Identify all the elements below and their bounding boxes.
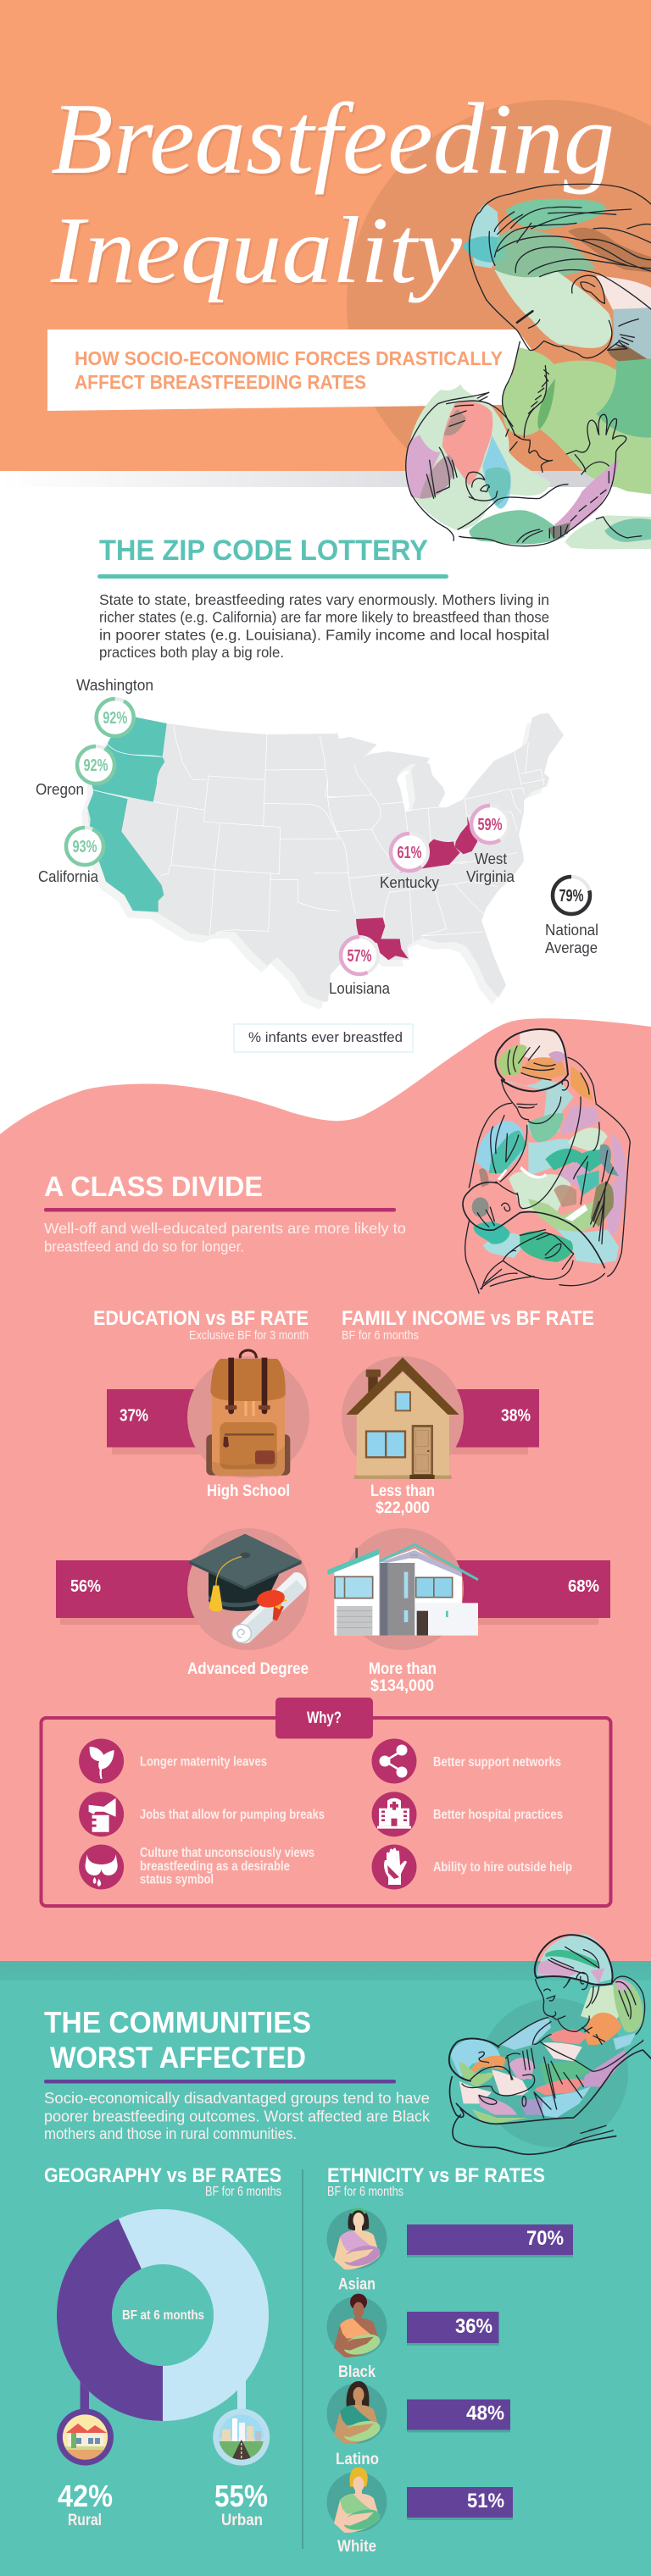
stat ring: West Virginia 59% [471,806,509,843]
tab: why: Why? [307,1709,342,1727]
icon: small house [346,1357,459,1479]
bar: Latino 48% [407,2399,510,2433]
state labels: Oregon [36,781,84,798]
icon: Black mother [327,2294,387,2358]
illustration: mother and baby, line art over watercolour [406,184,651,549]
state labels: Kentucky [380,874,439,891]
chart headings: education and family income: Exclusive BF for 3 month [189,1328,309,1343]
stat ring: Louisiana 57%: 57% [348,947,372,966]
title: Inequality [50,198,462,303]
icon: breast pump [79,1792,124,1836]
subtitle banner: HOW SOCIO-ECONOMIC FORCES DRASTICALLY [75,347,503,369]
bar: less than $22,000 38% [342,1356,539,1478]
intro text: richer states (e.g. California) are far more likely to breastfeed than those [99,608,549,625]
chart heading: geography [44,2164,281,2199]
intro text: poorer breastfeeding outcomes. Worst affected are Black [44,2108,431,2125]
stat ring: Louisiana 57% [341,937,378,974]
state labels: Washington [76,677,153,694]
icon: share network [371,1738,417,1784]
reason: status symbol: breastfeeding as a desirable [140,1859,290,1874]
category labels: $134,000 [370,1677,434,1695]
icon: hospital [371,1792,417,1836]
stat: urban 55%: Urban [221,2512,263,2529]
intro text: in poorer states (e.g. Louisiana). Family income and local hospital [99,627,549,644]
icon: Latino mother [327,2381,387,2445]
state labels: California [38,868,99,885]
map of the United States [36,677,598,1009]
heading: A CLASS DIVIDE [44,1171,263,1202]
heading: WORST AFFECTED [50,2041,306,2075]
tab: why [275,1698,373,1738]
icon: backpack [206,1350,290,1476]
stat: urban 55% [214,2479,268,2529]
bar: White 51%: 51% [467,2490,504,2512]
stat: rural 42%: Rural [68,2512,102,2529]
illustration: baby in arm [449,1934,651,2154]
reason: support networks: Better support networks [433,1755,561,1770]
state labels: National [545,922,598,939]
category labels: High School [207,1482,290,1500]
reason: maternity leave: Longer maternity leaves [140,1755,267,1770]
stat ring: Kentucky 61%: 61% [397,844,422,862]
bar: Asian 70% [407,2224,573,2257]
icon: modern house [327,1544,478,1636]
bar: advanced degree 56% [56,1528,309,1650]
bar: high school 37% [107,1356,309,1478]
icon: leaves [79,1738,124,1784]
bar: Black 36%: 36% [455,2315,492,2338]
chart headings: education and family income: EDUCATION vs BF RATE [93,1307,309,1330]
stat ring: California 93%: 93% [73,838,97,856]
reason: status symbol: status symbol [140,1873,214,1887]
donut chart: rural vs urban [57,2219,246,2421]
title [50,82,616,306]
stat: rural 42% [58,2479,113,2529]
panel: the communities worst affected [0,1934,651,2576]
bar: more than $134,000 68% [342,1528,610,1650]
icon: bra and drops [79,1845,124,1889]
intro text [44,2090,431,2142]
stat ring: California 93% [66,828,103,865]
subtitle banner: AFFECT BREASTFEEDING RATES [75,371,366,393]
donut chart: rural vs urban: BF at 6 months [122,2308,204,2323]
intro text: mothers and those in rural communities. [44,2125,297,2142]
icon: graduation cap and diploma [189,1534,306,1643]
legend: % infants ever breastfed [248,1029,403,1045]
panel: header [0,0,651,508]
bar: high school 37%: 37% [120,1406,148,1425]
stat ring: Washington 92%: 92% [103,709,127,728]
chart heading: geography: GEOGRAPHY vs BF RATES [44,2164,281,2187]
intro text: practices both play a big role. [99,644,284,661]
stat ring: Kentucky 61% [391,834,428,871]
category labels: Less than [370,1482,435,1500]
bar: Latino 48%: 48% [466,2402,504,2425]
bar: White 51% [407,2487,513,2520]
stat: urban 55%: 55% [214,2479,268,2513]
stat ring: Oregon 92% [77,746,114,784]
stat: rural 42%: 42% [58,2479,113,2513]
stat ring: Oregon 92%: 92% [83,756,108,775]
bar: more than $134,000 68%: 68% [568,1577,599,1596]
heading [44,2007,311,2075]
intro text: breastfeed and do so for longer. [44,1238,244,1255]
chart heading: ethnicity [327,2164,545,2199]
highlighted low-rate states [356,816,477,960]
illustration: mother cradling baby [463,1029,630,1294]
bar: Asian 70%: 70% [526,2227,564,2250]
reason: status symbol [140,1846,314,1887]
icon: White mother [327,2468,387,2534]
state labels: Average [545,939,598,956]
title: Breastfeeding [51,82,615,195]
bar: less than $22,000 38%: 38% [501,1406,531,1425]
stat ring: West Virginia 59%: 59% [478,816,503,834]
icon: urban badge [213,2409,270,2465]
title: Inequality [52,201,464,306]
category labels: $22,000 [376,1499,430,1517]
bar: advanced degree 56%: 56% [70,1577,101,1596]
title: Breastfeeding [53,85,616,197]
label: Latino: Latino [336,2451,379,2468]
intro text: Well-off and well-educated parents are more likely to [44,1220,406,1237]
reason: outside help: Ability to hire outside help [433,1860,572,1875]
chart heading: ethnicity: ETHNICITY vs BF RATES [327,2164,545,2187]
chart headings: education and family income [93,1307,594,1343]
panel: a class divide [0,1018,651,1965]
category labels: More than [369,1660,437,1678]
stat ring: Washington 92% [97,699,134,736]
category labels: Advanced Degree [187,1660,309,1678]
hair and face lines [406,184,651,546]
intro text [99,591,549,661]
heading: THE COMMUNITIES [44,2007,311,2040]
reason: hospital practices: Better hospital practices [433,1808,563,1822]
reason: pumping breaks: Jobs that allow for pumping breaks [140,1808,325,1822]
icon: Asian mother [327,2208,387,2269]
chart headings: education and family income: FAMILY INCOME vs BF RATE [342,1307,594,1330]
panel: why? reasons [41,1698,610,1906]
subtitle banner [47,330,532,411]
bar: Black 36% [407,2312,498,2346]
chart headings: education and family income: BF for 6 months [342,1328,419,1343]
stat ring: national average 79%: 79% [559,887,584,906]
chart heading: geography: BF for 6 months [205,2185,281,2199]
intro text: Socio-economically disadvantaged groups tend to have [44,2090,430,2107]
label: Black: Black [338,2363,376,2381]
label: White: White [337,2538,376,2556]
state labels: Virginia [466,868,515,885]
state labels: Louisiana [329,980,391,997]
legend [234,1024,413,1052]
icon: rural badge [57,2409,114,2465]
intro text [44,1220,406,1255]
panel: the zip code lottery [36,535,598,1052]
stat ring: national average 79% [553,877,590,914]
highlighted western states [87,717,167,912]
reason: status symbol: Culture that unconsciously views [140,1846,314,1860]
chart heading: ethnicity: BF for 6 months [327,2185,403,2199]
heading: THE ZIP CODE LOTTERY [99,535,428,567]
state labels [36,677,598,997]
icon: helping hand [371,1845,417,1889]
intro text: State to state, breastfeeding rates vary enormously. Mothers living in [99,591,549,608]
label: Asian: Asian [338,2275,376,2294]
category labels [187,1482,437,1695]
state labels: West [475,850,507,867]
